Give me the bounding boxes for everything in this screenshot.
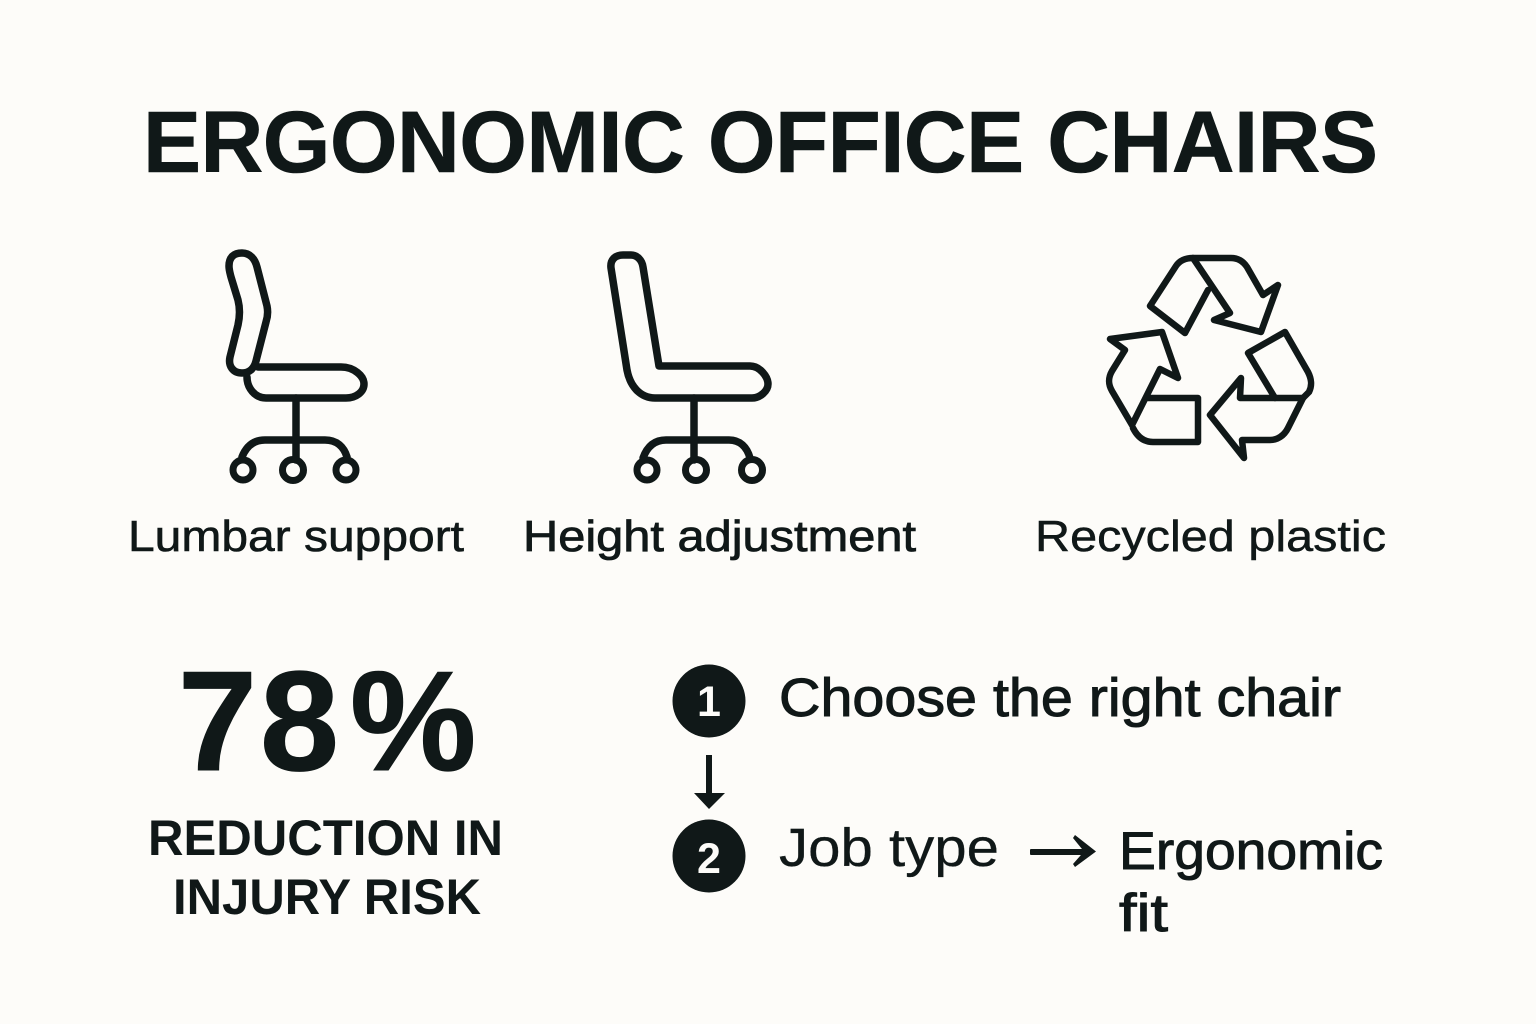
arrow: job type to ergonomic fit [1030, 835, 1096, 867]
statistic caption [148, 810, 503, 925]
title: ERGONOMIC OFFICE CHAIRS [143, 94, 1378, 191]
statistic: 78%: 78% [178, 642, 476, 801]
step 2 result: ergonomic fit [1119, 822, 1383, 943]
step 1 text: Choose the right chair [779, 668, 1341, 728]
step 2 text: job type: Job type [779, 818, 999, 878]
step 2 result: ergonomic fit: fit [1119, 884, 1168, 943]
step 2 badge [672, 820, 746, 892]
statistic caption: REDUCTION IN [148, 810, 503, 866]
label: recycled plastic: Recycled plastic [1035, 512, 1386, 561]
arrow: step 1 to step 2 [694, 755, 725, 809]
step 1 badge [672, 664, 746, 738]
icon: recycling symbol [1109, 258, 1311, 458]
step 2 badge: 2 [697, 835, 721, 883]
statistic caption: INJURY RISK [173, 869, 481, 925]
label: lumbar support: Lumbar support [128, 512, 464, 561]
label: height adjustment: Height adjustment [523, 512, 916, 561]
step 1 badge: 1 [697, 678, 721, 726]
icon: lumbar support chair [229, 253, 364, 480]
step 2 result: ergonomic fit: Ergonomic [1119, 822, 1383, 881]
icon: height adjustment chair [611, 255, 768, 480]
